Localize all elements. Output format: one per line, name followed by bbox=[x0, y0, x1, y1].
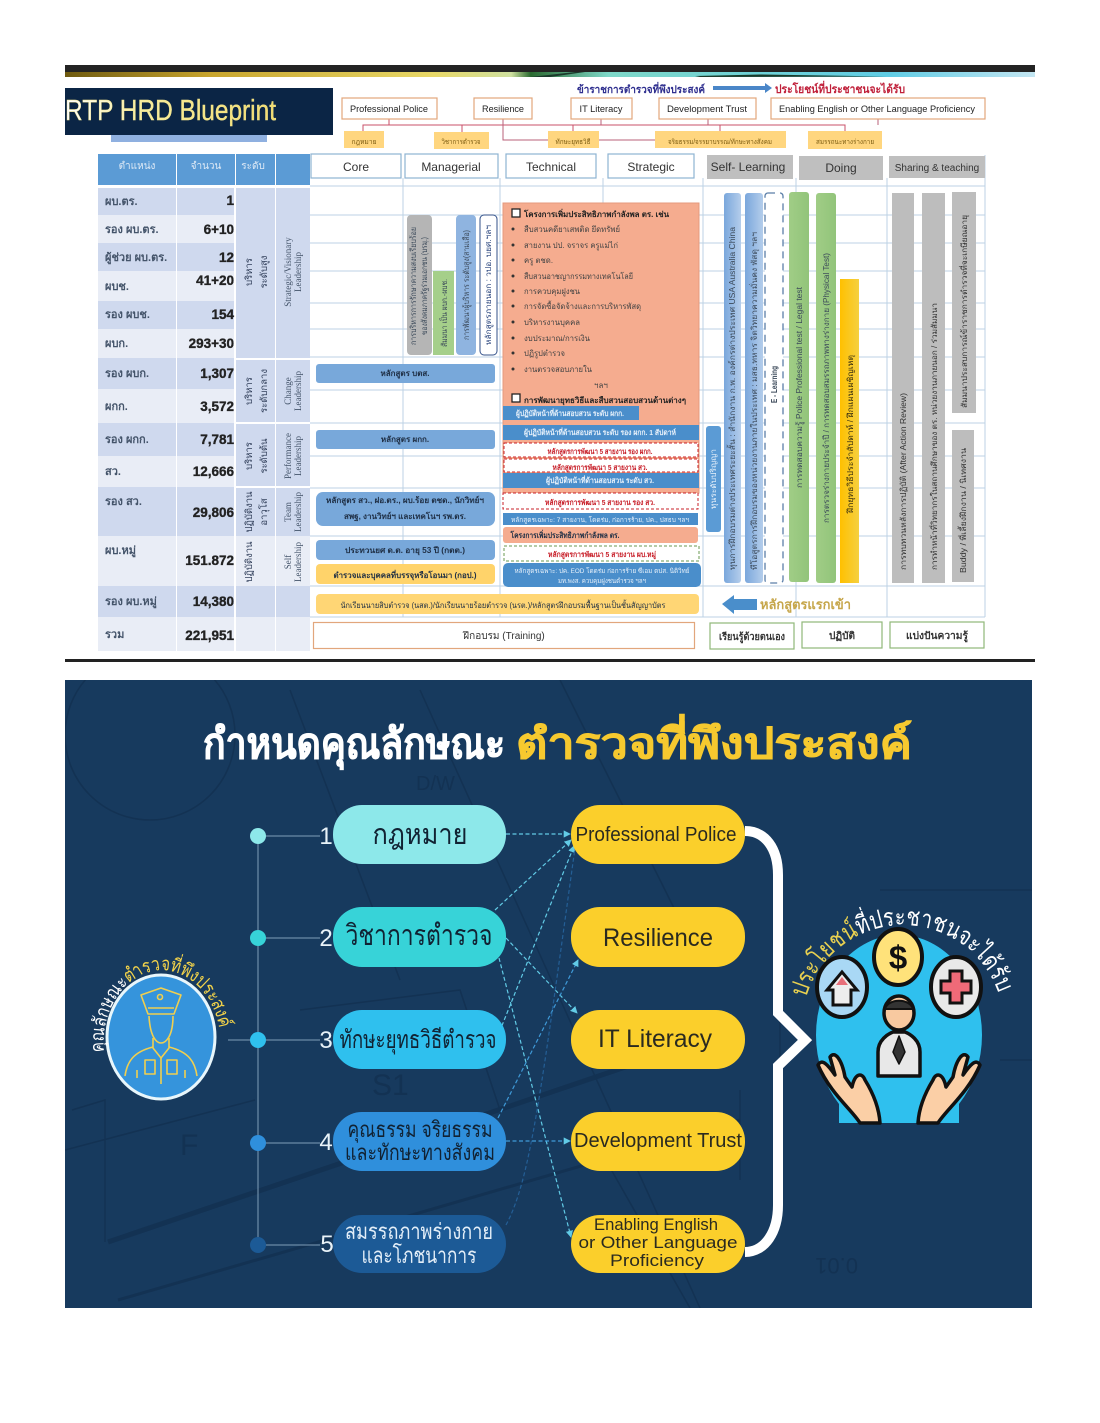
technical panel: orange program list: สายงาน ปป. จราจร ครูแม่ไก่ bbox=[524, 241, 618, 251]
headcount numbers: 14,380 bbox=[193, 594, 234, 609]
attribute pills: วิชาการตำรวจ bbox=[346, 920, 492, 952]
arrow: first entry course: หลักสูตรแรกเข้า bbox=[760, 597, 851, 613]
doing vertical bars: การตรวจร่างกายประจำปี / การทดสอบสมรรถภาพทางร่างกาย (Physical Test) bbox=[822, 253, 831, 523]
column headers: training types: Technical bbox=[526, 160, 576, 174]
level labels: Leadership bbox=[293, 436, 303, 476]
headcount numbers: 221,951 bbox=[185, 628, 234, 643]
competency box labels bbox=[350, 104, 976, 114]
blueprint background: 0.01 bbox=[815, 1253, 858, 1278]
attribute pills bbox=[333, 805, 506, 1273]
table rows background bbox=[98, 188, 310, 651]
icon: police officer badge bbox=[107, 975, 215, 1099]
level labels: Self bbox=[283, 555, 293, 569]
column headers: training types: Self- Learning bbox=[711, 160, 785, 174]
doing vertical bars bbox=[789, 192, 859, 583]
competency pills: or Other Language bbox=[578, 1233, 738, 1252]
level labels: บริหาร bbox=[244, 377, 255, 405]
doing vertical bars: ฝึกยุทธวิธีประจำสัปดาห์ / ฝึกแผนเผชิญเหตุ bbox=[845, 355, 855, 514]
timeline connector bbox=[228, 828, 320, 1253]
position names bbox=[105, 196, 167, 641]
top decorative header bar bbox=[65, 65, 1035, 77]
column headers: training types: Core bbox=[343, 160, 369, 174]
icon: dollar coin bbox=[874, 929, 922, 985]
heading: desired police to public benefit: ข้าราชการตำรวจที่พึงประสงค์ bbox=[577, 81, 705, 96]
self-learning vertical bars: ทุนระดับปริญญา bbox=[709, 449, 718, 509]
position names: ผบ.ตร. bbox=[105, 196, 138, 208]
technical panel: course boxes: หลักสูตรการพัฒนา 5 สายงาน สว. bbox=[552, 463, 648, 473]
self-learning vertical bars: ทีโอสูตรการฝึกอบรมของหน่วยงานภายในประเทศ : มสธ.ทหาร จิตวิทยาความมั่นคง พัสดุ ฯลฯ bbox=[748, 232, 760, 570]
position names: ผบช. bbox=[105, 281, 129, 293]
technical panel: orange program list: การควบคุมฝูงชน bbox=[524, 287, 581, 297]
headcount numbers: 1 bbox=[226, 193, 234, 208]
heading: desired police to public benefit: ประโยชน์ที่ประชาชนจะได้รับ bbox=[775, 80, 905, 96]
curved text: public benefit: ประโยชน์ที่ประชาชนจะได้รับ bbox=[792, 906, 1011, 995]
table header: จำนวน bbox=[191, 161, 222, 172]
level labels: อาวุโส bbox=[258, 498, 270, 526]
self-learning vertical bars: E - Learning bbox=[770, 366, 779, 403]
position names: ผบ.หมู่ bbox=[105, 545, 136, 558]
technical panel: orange program list: งบประมาณ/การเงิน bbox=[524, 334, 591, 343]
managerial vertical bars: การพัฒนาผู้บริหาร ระดับสูง(สามเสือ) bbox=[462, 230, 472, 340]
chart grid lines bbox=[310, 155, 985, 617]
level labels: Change bbox=[283, 377, 293, 405]
attribute tags: จริยธรรม/จรรยาบรรณ/ทักษะทางสังคม bbox=[668, 138, 772, 146]
level labels: Leadership bbox=[293, 252, 303, 292]
core courses: หลักสูตร สว., ฝอ.ตร., ผบ.ร้อย ตชด., นักวิทย์ฯ bbox=[326, 495, 485, 506]
competency pills bbox=[571, 805, 745, 1273]
attribute tags: สมรรถนะทางร่างกาย bbox=[816, 139, 874, 146]
table header bbox=[98, 154, 310, 185]
curved text: desired police characteristics: คุณลักษณะตำรวจที่พึงประสงค์ bbox=[91, 954, 236, 1051]
technical panel: orange program list: ปฏิรูปตำรวจ bbox=[524, 349, 565, 359]
icon: medical cross bbox=[931, 957, 981, 1017]
core courses: นักเรียนนายสิบตำรวจ (นสต.)/นักเรียนนายร้อยตำรวจ (นรต.)/หลักสูตรฝึกอบรมพื้นฐานเป็นชั้นสัญญาบัตร bbox=[340, 599, 666, 611]
level labels: Strategic/Visionary bbox=[283, 237, 293, 307]
numbers: 5 bbox=[320, 1231, 334, 1258]
position names: รอง ผบช. bbox=[105, 309, 150, 321]
footer category boxes: เรียนรู้ด้วยตนเอง bbox=[719, 631, 785, 644]
headcount numbers: 1,307 bbox=[200, 366, 234, 381]
technical panel: course boxes: มท.พงส. ควบคุมฝูงชนตำรวจ ฯลฯ bbox=[558, 577, 646, 585]
column headers: training types: Sharing & teaching bbox=[895, 163, 979, 174]
technical panel: course boxes: ผู้ปฏิบัติหน้าที่ด้านสอบสวน ระดับ ผกก. bbox=[516, 407, 624, 419]
position names: รอง ผกก. bbox=[105, 434, 149, 446]
footer category boxes: ฝึกอบรม (Training) bbox=[462, 630, 545, 642]
doing vertical bars: การทดสอบความรู้ Police Professional test / Legal test bbox=[795, 286, 805, 488]
column headers: training types: Strategic bbox=[627, 160, 675, 174]
sharing and teaching vertical bars: สัมมนาประสบการณ์ข้าราชการตำรวจที่จะเกษียณอายุ bbox=[958, 215, 969, 408]
bracket bbox=[745, 831, 805, 1252]
sharing and teaching vertical bars bbox=[892, 192, 976, 583]
attribute pills: ทักษะยุทธวิธีตำรวจ bbox=[340, 1026, 496, 1055]
managerial vertical bars: การบริหารการรักษาความสงบเรียบร้อย bbox=[409, 227, 418, 345]
competency boxes bbox=[342, 98, 985, 119]
headcount numbers: 29,806 bbox=[193, 505, 234, 520]
blueprint background: S1 bbox=[372, 1069, 409, 1102]
managerial vertical bars: หลักสูตรภายนอก : วปอ. บยศ.ฯลฯ bbox=[484, 225, 494, 345]
competency box labels: IT Literacy bbox=[580, 104, 623, 114]
headcount numbers: 151.872 bbox=[185, 553, 234, 568]
position names: ผู้ช่วย ผบ.ตร. bbox=[105, 251, 167, 265]
technical panel: course boxes: หลักสูตรการพัฒนา 5 สายงาน รอง สว. bbox=[545, 498, 655, 508]
numbers: 1 bbox=[319, 823, 333, 850]
position names: รอง สว. bbox=[105, 496, 142, 508]
sharing and teaching vertical bars: การทบทวนหลังการปฏิบัติ (After Action Review) bbox=[899, 393, 908, 570]
headcount numbers: 6+10 bbox=[204, 222, 234, 237]
competency pills: Resilience bbox=[603, 924, 713, 952]
level labels: ระดับสูง bbox=[259, 256, 270, 288]
technical panel: orange program list: ครู ตชด. bbox=[524, 256, 553, 266]
title: RTP HRD Blueprint bbox=[65, 88, 333, 142]
self-learning vertical bars bbox=[706, 193, 783, 583]
managerial vertical bars bbox=[407, 215, 497, 355]
headcount numbers: 3,572 bbox=[200, 399, 234, 414]
competency pills: Proficiency bbox=[610, 1251, 705, 1270]
competency box labels: Development Trust bbox=[667, 104, 748, 114]
heading: desired police to public benefit bbox=[577, 80, 905, 96]
technical panel: course boxes: ผู้ปฏิบัติหน้าที่ด้านสอบสวน ระดับ สว. bbox=[546, 474, 654, 486]
core courses: หลักสูตร ผกก. bbox=[381, 435, 429, 445]
blueprint background: D/W bbox=[416, 773, 455, 795]
level labels: ปฏิบัติงาน bbox=[244, 491, 255, 533]
sharing and teaching vertical bars: Buddy / พี่เลี้ยงฝึกงาน / นิเทศงาน bbox=[957, 447, 968, 573]
table header: ตำแหน่ง bbox=[119, 161, 156, 172]
technical panel: orange program list: งานตรวจสอบภายใน bbox=[524, 365, 593, 374]
position names: ผบก. bbox=[105, 338, 128, 350]
level labels: Leadership bbox=[293, 492, 303, 532]
technical panel: orange program list: สืบสวนอาชญากรรมทางเทคโนโลยี bbox=[524, 271, 633, 281]
competency pills: Professional Police bbox=[576, 824, 736, 846]
technical panel: course boxes: โครงการเพิ่มประสิทธิภาพกำลังพล ตร. bbox=[510, 529, 620, 540]
icon: house bbox=[817, 957, 867, 1017]
level labels: ระดับต้น bbox=[259, 438, 270, 474]
technical panel: course boxes: หลักสูตรการพัฒนา 5 สายงาน รอง ผกก. bbox=[548, 447, 652, 457]
core courses: สพฐ, งานวิทย์ฯ และเทคโนฯ รพ.ตร. bbox=[344, 511, 466, 522]
table header: ระดับ bbox=[241, 161, 265, 172]
competency pills: Enabling English bbox=[594, 1215, 718, 1234]
level labels: ระดับกลาง bbox=[259, 369, 270, 413]
blueprint background bbox=[65, 650, 1032, 1308]
core courses: ตำรวจและบุคคลที่บรรจุหรือโอนมา (กอป.) bbox=[334, 569, 477, 581]
core courses: ประทวนยศ ด.ต. อายุ 53 ปี (กตต.) bbox=[345, 545, 465, 556]
technical panel: orange program list: ฯลฯ bbox=[594, 381, 608, 390]
column headers: training types: Managerial bbox=[421, 160, 481, 174]
icon: public benefit bbox=[816, 929, 982, 1123]
headcount numbers: 12,666 bbox=[193, 464, 234, 479]
footer category boxes: ปฏิบัติ bbox=[829, 630, 855, 642]
headcount numbers: 154 bbox=[211, 307, 234, 322]
attribute pills: สมรรถภาพร่างกาย bbox=[345, 1219, 493, 1244]
blueprint background: F bbox=[180, 1129, 198, 1162]
attribute pills: และทักษะทางสังคม bbox=[345, 1140, 495, 1165]
position names: รอง ผบก. bbox=[105, 368, 149, 380]
core courses bbox=[316, 364, 699, 614]
managerial vertical bars: ของสังคมภาครัฐร่วมเอกชน (บรมฺ.) bbox=[420, 237, 429, 335]
column headers: training types bbox=[311, 154, 985, 180]
technical panel: orange program list: บริหารงานบุคคล bbox=[524, 318, 580, 327]
technical panel: course boxes: หลักสูตรการพัฒนา 5 สายงาน ผบ.หมู่ bbox=[548, 550, 656, 560]
attribute tags bbox=[344, 131, 882, 149]
table: positions and headcount bbox=[98, 154, 310, 651]
headcount numbers: 41+20 bbox=[196, 273, 234, 288]
level labels bbox=[244, 237, 303, 583]
numbers: 2 bbox=[319, 925, 333, 952]
position names: รอง ผบ.หมู่ bbox=[105, 596, 157, 609]
position names: ผกก. bbox=[105, 401, 128, 413]
technical panel: course boxes: หลักสูตรเฉพาะ: ปค. EOD โดดร่ม ก่อการร้าย ซีเอม ตปส. นิติวิทย์ bbox=[514, 567, 690, 575]
competency box labels: Resilience bbox=[482, 104, 524, 114]
icon: dollar coin: $ bbox=[889, 939, 907, 976]
competency box labels: Enabling English or Other Language Proficiency bbox=[779, 104, 976, 114]
technical panel: course boxes bbox=[503, 406, 701, 587]
attribute pills: และโภชนาการ bbox=[362, 1243, 477, 1268]
title: RTP HRD Blueprint: RTP HRD Blueprint bbox=[65, 95, 276, 127]
level labels: ปฏิบัติงาน bbox=[244, 541, 255, 583]
level labels: Performance bbox=[283, 433, 293, 479]
technical panel: orange program list: โครงการเพิ่มประสิทธิภาพกำลังพล ตร. เช่น bbox=[523, 208, 670, 219]
attribute tags: กฎหมาย bbox=[352, 139, 376, 146]
technical panel: course boxes: ผู้ปฏิบัติหน้าที่ด้านสอบสวน ระดับ รอง ผกก. 1 สัปดาห์ bbox=[524, 426, 676, 438]
column headers: training types: Doing bbox=[825, 161, 857, 175]
competency connector lines bbox=[363, 119, 878, 140]
level labels: Leadership bbox=[293, 542, 303, 582]
position names: สว. bbox=[105, 466, 121, 478]
headcount numbers: 7,781 bbox=[200, 432, 234, 447]
icon: person bbox=[878, 996, 920, 1076]
heading highlight: ตำรวจที่พึงประสงค์ bbox=[516, 714, 912, 767]
competency pills: Development Trust bbox=[574, 1130, 742, 1152]
technical panel: orange program list: การจัดซื้อจัดจ้างและการบริหารพัสดุ bbox=[524, 300, 641, 311]
competency box labels: Professional Police bbox=[350, 104, 428, 114]
attribute tags: ทักษะยุทธวิธี bbox=[556, 138, 590, 146]
icon: right hand bbox=[918, 1055, 980, 1123]
attribute pills: กฎหมาย bbox=[372, 819, 468, 851]
self-learning vertical bars: ทุนการฝึกอบรมต่างประเทศระยะสั้น : สำนักงาน ก.พ. องค์กรต่างประเทศ USA Australia China bbox=[726, 226, 737, 570]
position names: รอง ผบ.ตร. bbox=[105, 224, 159, 236]
heading: กำหนดคุณลักษณะ bbox=[203, 720, 505, 770]
headcount numbers bbox=[185, 193, 234, 643]
headcount numbers: 12 bbox=[219, 250, 234, 265]
technical panel: orange program list: การพัฒนายุทธวิธีและสืบสวนสอบสวนด้านต่างๆ bbox=[524, 395, 686, 406]
panel: desired police characteristics bbox=[65, 680, 1032, 1308]
managerial vertical bars: สัมมนา เป็น ผบก.-ผบช. bbox=[439, 279, 449, 347]
position names: รวม bbox=[105, 629, 124, 641]
numbers bbox=[319, 823, 334, 1258]
technical panel: orange program list: สืบสวนคดียาเสพติด ยึดทรัพย์ bbox=[524, 224, 620, 234]
arrow: first entry course bbox=[722, 595, 851, 614]
technical panel: course boxes: หลักสูตรเฉพาะ: 7 สายงาน, โดดร่ม, ก่อการร้าย, ปค., ปสธบ ฯลฯ bbox=[511, 516, 689, 524]
level labels: Team bbox=[283, 502, 293, 522]
level labels: Leadership bbox=[293, 371, 303, 411]
headcount numbers: 293+30 bbox=[189, 336, 234, 351]
footer category boxes bbox=[314, 622, 984, 649]
attribute pills: คุณธรรม จริยธรรม bbox=[348, 1117, 492, 1143]
attribute tags: วิชาการตำรวจ bbox=[441, 138, 480, 146]
sharing and teaching vertical bars: การทำหน้าที่วิทยากรในสถานศึกษาของ ตร. หน่วยงานภายนอก / ร่วมสัมมนา bbox=[928, 303, 939, 570]
footer category boxes: แบ่งปันความรู้ bbox=[906, 630, 969, 643]
dashed mapping arrows bbox=[495, 834, 578, 1237]
competency pills: IT Literacy bbox=[598, 1025, 712, 1053]
technical panel: orange program list bbox=[503, 203, 699, 493]
level labels: บริหาร bbox=[244, 442, 255, 470]
numbers: 3 bbox=[319, 1027, 333, 1054]
numbers: 4 bbox=[319, 1129, 333, 1156]
core courses: หลักสูตร บตส. bbox=[380, 369, 430, 379]
icon: left hand bbox=[818, 1055, 880, 1123]
level labels: บริหาร bbox=[244, 258, 255, 286]
